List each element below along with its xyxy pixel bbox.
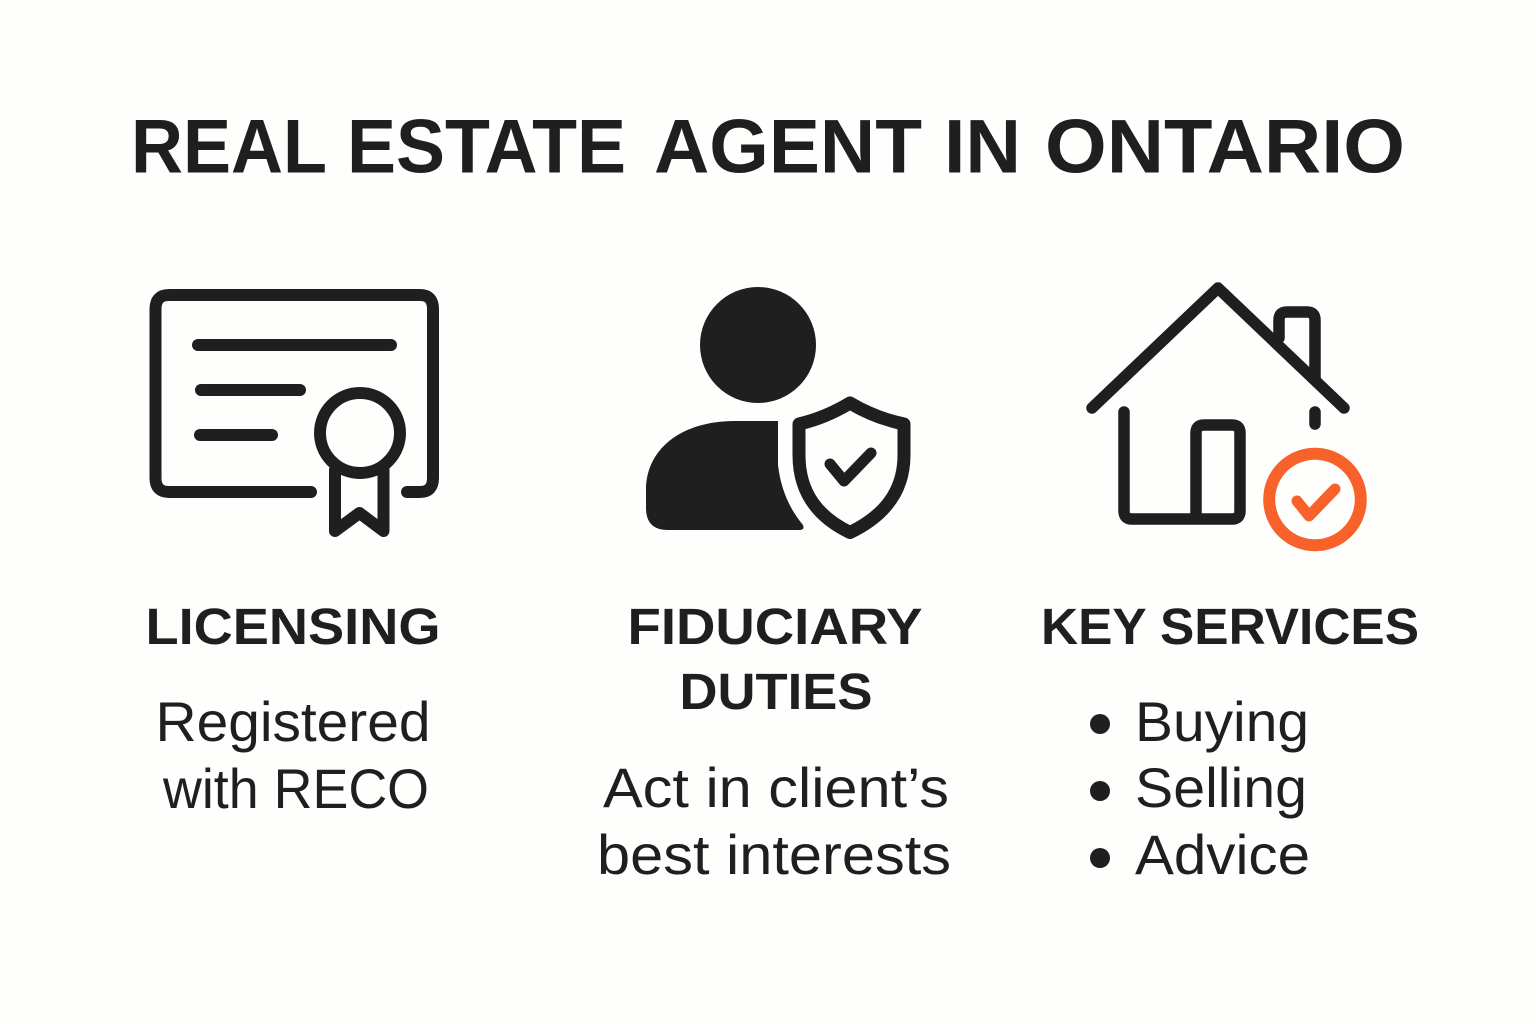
text: registered with RECO: Registered (156, 690, 430, 753)
heading: licensing: LICENSING (146, 598, 440, 655)
text: registered with RECO (156, 690, 430, 820)
title: AGENT (654, 104, 922, 190)
heading: fiduciary duties: FIDUCIARY (628, 598, 922, 655)
text: act in client's best interests: best interests (597, 823, 951, 886)
text: act in client's best interests: Act in client’s (603, 756, 949, 819)
icon: certificate (156, 295, 433, 531)
list: services: Buying (1135, 690, 1309, 753)
icon: house with check (1092, 288, 1361, 545)
heading: fiduciary duties: DUTIES (680, 663, 872, 720)
heading: fiduciary duties (628, 598, 922, 720)
list: services: Selling (1135, 756, 1307, 819)
title: ESTATE (347, 104, 626, 190)
text: act in client's best interests (597, 756, 951, 886)
title: REAL (131, 104, 327, 190)
panel: fiduciary duties (597, 287, 951, 886)
title: IN (944, 104, 1021, 190)
title: ONTARIO (1045, 104, 1405, 190)
list: services: Advice (1135, 823, 1310, 886)
list: services (1090, 690, 1310, 886)
heading: key services: KEY SERVICES (1041, 598, 1419, 655)
title (131, 104, 1405, 190)
panel: key services (1041, 288, 1419, 886)
icon: person with shield (646, 287, 904, 532)
panel: licensing (146, 295, 440, 820)
text: registered with RECO: with RECO (162, 757, 429, 820)
